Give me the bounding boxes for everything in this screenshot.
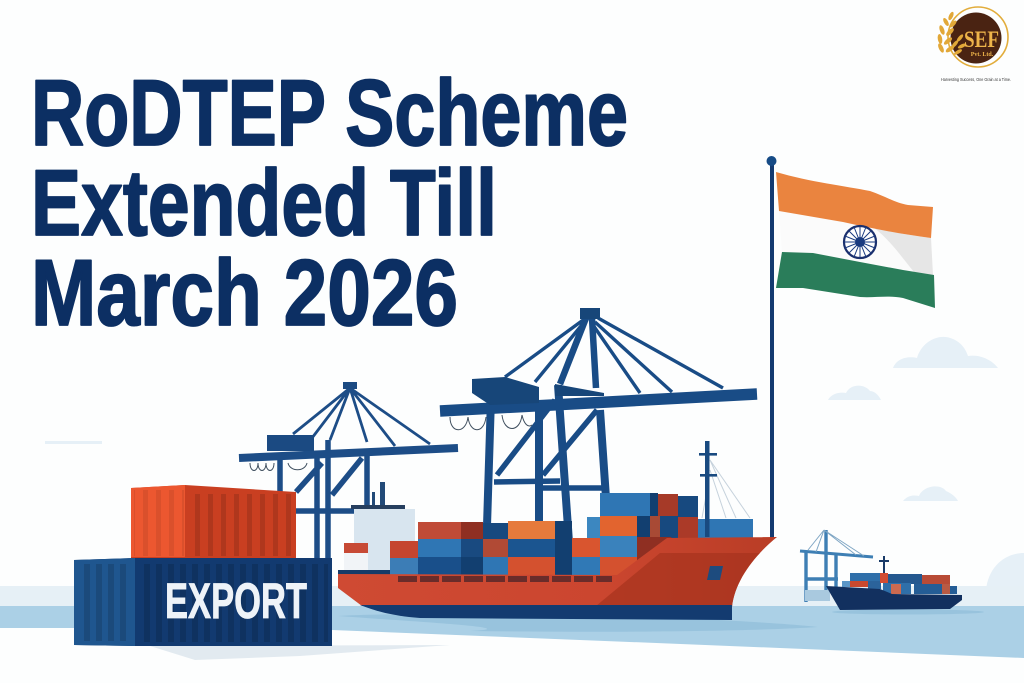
ship superstructure (338, 482, 418, 576)
title: Extended Till (31, 150, 497, 255)
large crane braces (494, 400, 606, 488)
horizon band (0, 586, 1024, 607)
large gantry crane (440, 308, 757, 542)
logo: SEF Pvt. Ltd. (937, 7, 1011, 82)
orange container (131, 485, 296, 558)
small ship mast (879, 556, 889, 573)
ship bow window (707, 566, 723, 580)
large ship (338, 441, 780, 620)
small gantry hanging wires (250, 463, 307, 470)
small gantry cabin (267, 435, 314, 451)
sky clouds and distant haze (45, 337, 1024, 590)
logo ring (948, 7, 1008, 67)
small ship containers (842, 573, 957, 594)
large crane hanging wires (450, 415, 532, 430)
ship mast and rigging (699, 441, 750, 537)
ship hull (338, 537, 777, 607)
large crane top (580, 308, 600, 319)
ship hull darker bow panel (598, 553, 760, 606)
container ground shadow (150, 645, 450, 660)
large crane machine house (472, 377, 539, 405)
ship cargo containers (390, 493, 753, 577)
small crane cables (808, 530, 864, 556)
distant small ship (826, 556, 962, 610)
EXPORT containers (74, 485, 332, 646)
logo wheat (937, 11, 967, 56)
Ashoka Chakra (844, 226, 876, 258)
small gantry top (343, 382, 357, 389)
logo subtext: Pvt. Ltd. (971, 52, 994, 58)
title: RoDTEP Scheme (31, 60, 628, 165)
flag white shading (873, 227, 933, 275)
flag white stripe (779, 211, 933, 275)
sea (0, 606, 1024, 658)
small crane base (805, 590, 830, 601)
distant small crane (800, 530, 873, 602)
large crane boom (440, 394, 757, 411)
small crane boom (800, 551, 873, 557)
ship portholes (398, 576, 612, 582)
small gantry crane (239, 382, 458, 558)
blue container (74, 558, 332, 646)
flag pole (766, 156, 776, 538)
ship hull navy waterline (360, 605, 732, 620)
EXPORT label: EXPORT (165, 573, 307, 629)
Indian flag (776, 172, 935, 308)
title (31, 60, 628, 345)
large crane legs (487, 385, 606, 542)
small gantry boom (239, 448, 458, 458)
logo text: SEF (964, 27, 999, 52)
small gantry legs (280, 440, 367, 558)
large crane trolley (555, 384, 604, 396)
small crane legs (806, 530, 838, 602)
logo disc (950, 12, 1002, 64)
flag orange stripe (776, 172, 933, 238)
flag green stripe (776, 252, 935, 308)
title: March 2026 (31, 240, 458, 345)
large crane struts (560, 318, 596, 388)
large crane cables (505, 315, 723, 393)
small ship hull (826, 586, 962, 610)
small gantry cables (293, 388, 430, 446)
sea shadows (338, 610, 984, 632)
